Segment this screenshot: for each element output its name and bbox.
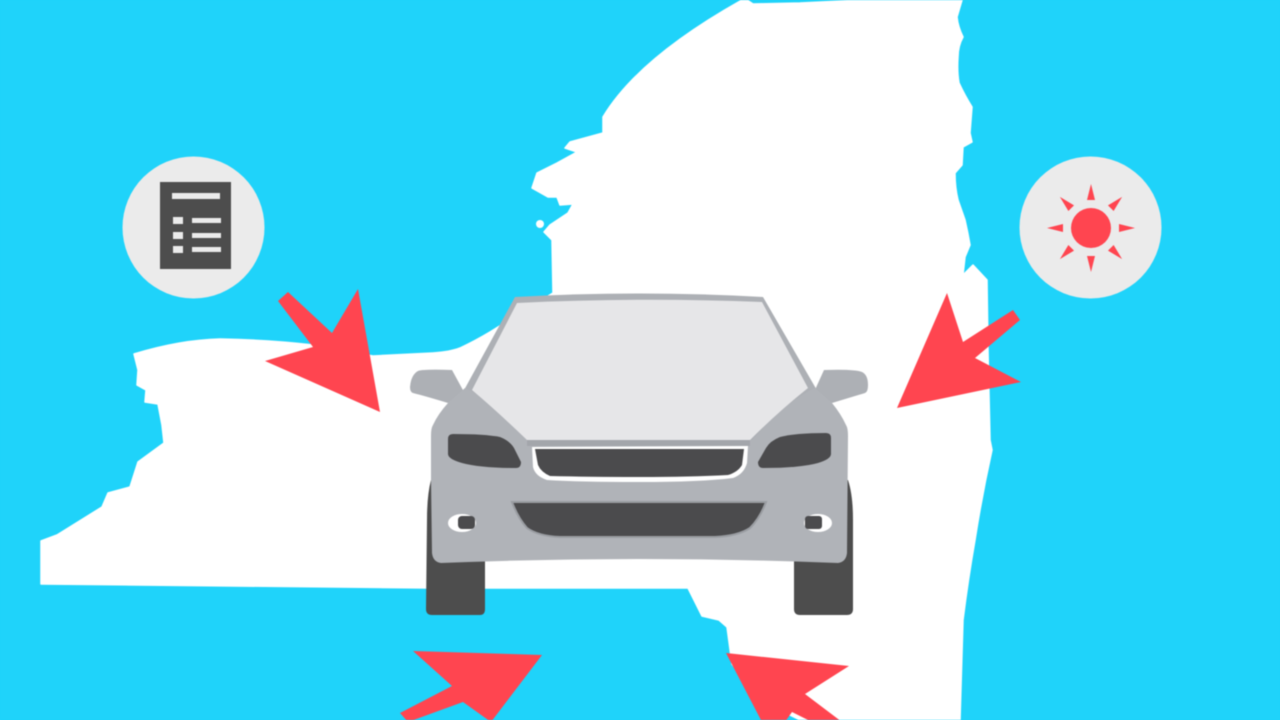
mirrors xyxy=(410,370,868,403)
body xyxy=(431,388,848,563)
car xyxy=(410,294,868,615)
icon: sun in circle xyxy=(1020,156,1162,298)
grille xyxy=(532,446,748,482)
map: New York State silhouette xyxy=(41,0,992,720)
arrow: bottom left xyxy=(400,651,542,720)
wheels xyxy=(426,480,853,615)
windshield glass xyxy=(472,300,808,440)
arrow: top left xyxy=(265,289,380,412)
windshield frame xyxy=(463,294,818,445)
lower intake xyxy=(512,502,766,537)
fog lights xyxy=(448,514,832,532)
headlights xyxy=(448,433,831,468)
hood strip xyxy=(527,440,750,446)
arrow: top right xyxy=(897,293,1021,408)
arrow: bottom right xyxy=(726,653,849,720)
icon: document in circle xyxy=(122,156,264,298)
